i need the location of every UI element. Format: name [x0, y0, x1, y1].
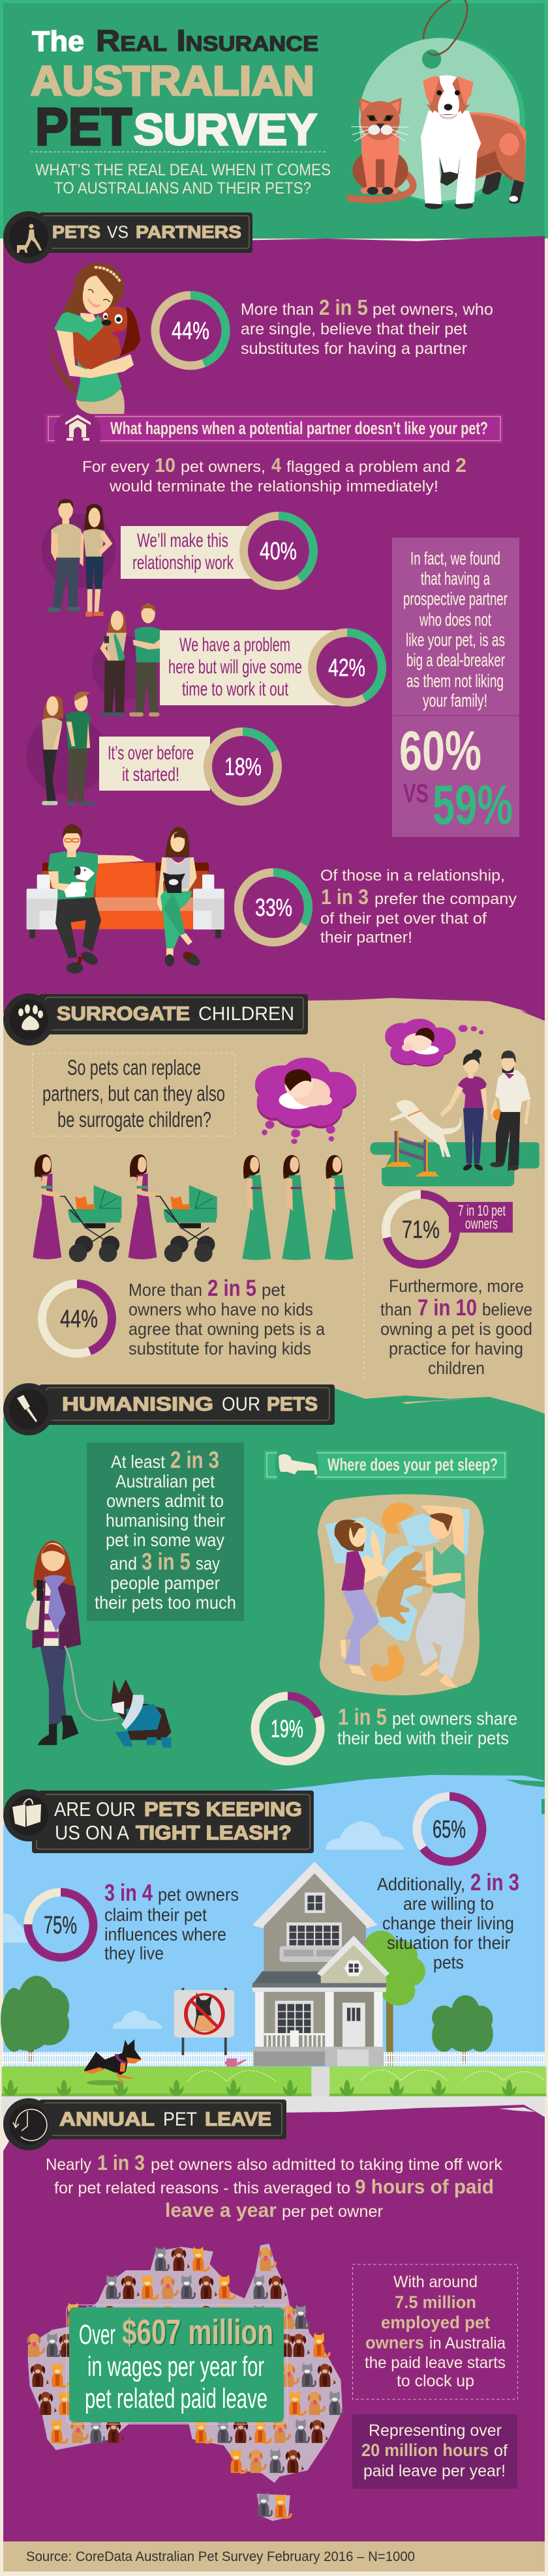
title: Real Insurance	[96, 23, 318, 57]
panel: surrogate children	[3, 993, 545, 1421]
heading: surrogate children	[3, 993, 308, 1046]
text: single owners stat: More than	[241, 300, 314, 319]
text: no kids stat: pet	[262, 1280, 285, 1300]
subtitle: TO AUSTRALIANS AND THEIR PETS?	[54, 179, 311, 198]
label: we have a problem: We have a problem	[179, 634, 290, 656]
text: company of pet stat	[320, 867, 517, 946]
text block: humanising stat: their pets too much	[95, 1592, 236, 1613]
map: Australia filled with cats and dogs	[27, 2244, 343, 2521]
icon: clock	[13, 2109, 47, 2141]
title: AUSTRALIAN	[31, 57, 314, 104]
text: no kids stat: owners who have no kids	[129, 1300, 313, 1319]
text block: humanising stat: At least	[111, 1452, 165, 1472]
icon: clouds	[3, 1821, 404, 2028]
label: we have a problem: here but will give some	[168, 656, 302, 678]
text: time off work stat: for pet related reasons - this averaged to	[54, 2179, 350, 2197]
text block: humanising stat: say	[196, 1553, 220, 1573]
illustration: running dog	[84, 2040, 142, 2085]
panel: deal-breaker comparison: that having a	[421, 568, 490, 589]
text: no kids stat	[129, 1276, 326, 1358]
illustration: thought cloud with baby	[255, 1058, 356, 1144]
text: single owners stat: 2 in 5	[319, 295, 368, 319]
panel: deal-breaker comparison: as them not liking	[406, 671, 504, 691]
callout: $607 million	[67, 2305, 287, 2424]
text: company of pet stat: of their pet over that of	[320, 910, 487, 928]
title	[31, 23, 318, 156]
text block: humanising stat: humanising their	[106, 1510, 225, 1530]
subtitle: WHAT’S THE REAL DEAL WHEN IT COMES	[35, 161, 331, 179]
donut: 18%: 18%	[224, 754, 262, 781]
donut: 42%: 42%	[328, 654, 365, 682]
donut: 18%	[207, 731, 278, 802]
text: change living situation: pets	[433, 1952, 464, 1972]
callout: 20 million hours	[352, 2414, 517, 2489]
heading: annual pet leave: PET	[163, 2109, 197, 2130]
text: no kids stat: 2 in 5	[207, 1276, 256, 1301]
heading: surrogate children: CHILDREN	[198, 1003, 294, 1025]
text: change living situation: situation for their	[387, 1933, 510, 1953]
text: change living situation: change their living	[382, 1913, 514, 1933]
illustration: small thought cloud with baby	[385, 1019, 483, 1066]
text: no kids stat: More than	[129, 1280, 202, 1300]
text: influence where they live: 3 in 4	[104, 1879, 153, 1906]
text: time off work stat: 1 in 3	[97, 2151, 145, 2174]
callout: 7.5 million employed pet owners: With around	[393, 2273, 478, 2291]
heading: annual pet leave: ANNUAL	[59, 2109, 155, 2130]
heading: surrogate children: SURROGATE	[57, 1003, 190, 1025]
text: for every 10 pet owners: pet owners,	[181, 458, 266, 476]
heading: are our pets keeping us on a tight leash: PETS KEEPING	[144, 1798, 302, 1821]
panel: pets vs partners	[3, 211, 545, 1023]
heading: annual pet leave: LEAVE	[205, 2109, 271, 2130]
panel: annual pet leave	[3, 2098, 545, 2541]
text: share bed stat: 1 in 5	[338, 1705, 387, 1730]
text: no kids stat: agree that owning pets is a	[129, 1319, 326, 1339]
title: The	[32, 25, 84, 57]
title: SURVEY	[134, 105, 317, 154]
panel: deal-breaker comparison: 60%	[399, 720, 481, 782]
text: share bed stat	[337, 1705, 517, 1748]
text: change living situation: are willing to	[403, 1894, 494, 1914]
text: for every 10 pet owners: For every	[82, 458, 149, 476]
callout: $607 million: in wages per year for	[87, 2351, 264, 2382]
callout: 20 million hours: paid leave per year!	[363, 2462, 506, 2480]
text: influence where they live	[104, 1879, 239, 1963]
callout: $607 million: $607 million	[122, 2313, 273, 2352]
text block: humanising stat	[87, 1442, 244, 1621]
text: for every 10 pet owners: 4	[271, 454, 282, 476]
donut: 65%: 65%	[433, 1816, 466, 1843]
donut: 40%	[244, 516, 313, 585]
text: company of pet stat: prefer the company	[374, 890, 517, 908]
text: practice for children stat: owning a pet is good	[380, 1319, 532, 1339]
heading: humanising our pets	[3, 1383, 335, 1435]
callout: $607 million: pet related paid leave	[85, 2383, 267, 2414]
text block: humanising stat: owners admit to	[106, 1491, 224, 1511]
text block: humanising stat: people pamper	[110, 1573, 220, 1593]
panel: deal-breaker comparison: who does not	[419, 609, 491, 630]
text: share bed stat: their bed with their pets	[337, 1728, 509, 1748]
illustration: couple three	[26, 692, 106, 805]
label: we'll make this work: We’ll make this	[137, 530, 228, 551]
panel: are our pets keeping us on a tight leash	[1, 1775, 546, 2125]
text: practice for children stat: Furthermore, more	[389, 1276, 524, 1296]
callout: 7.5 million employed pet owners: in Australia	[429, 2334, 506, 2352]
callout: 7.5 million employed pet owners: employed pet	[381, 2313, 490, 2332]
illustration: couple one	[42, 499, 115, 617]
heading: are our pets keeping us on a tight leash: US ON A	[55, 1821, 129, 1844]
callout: 7.5 million employed pet owners: to clock up	[397, 2372, 474, 2390]
text: single owners stat: substitutes for having a partner	[241, 340, 467, 358]
donut: 75%: 75%	[44, 1912, 77, 1939]
callout: 7.5 million employed pet owners: 7.5 million	[395, 2292, 476, 2312]
footer: source	[3, 2541, 545, 2571]
heading: pets vs partners	[3, 211, 252, 263]
label: we have a problem	[160, 630, 339, 705]
icon: pet carrier	[12, 1799, 41, 1827]
text: practice for children stat: believe	[482, 1300, 532, 1319]
text: practice for children stat: than	[380, 1300, 412, 1319]
heading: are our pets keeping us on a tight leash: TIGHT LEASH?	[136, 1821, 292, 1844]
text: practice for children stat: 7 in 10	[418, 1295, 477, 1321]
callout: surrogate question: be surrogate children?	[57, 1107, 211, 1132]
text: share bed stat: pet owners share	[392, 1708, 517, 1729]
text: time off work stat: 9 hours of paid	[355, 2175, 494, 2198]
label: it's over before it started: it started!	[122, 764, 179, 785]
icon: pet tag with cat and dog	[350, 0, 526, 209]
text: time off work stat: per pet owner	[282, 2203, 383, 2221]
text: practice for children stat: practice for having	[389, 1339, 523, 1358]
text block: humanising stat: and	[110, 1553, 137, 1573]
donut: 44% kids: 44%	[60, 1306, 98, 1333]
text: time off work stat: leave a year	[165, 2199, 277, 2221]
callout: 7.5 million employed pet owners: the paid leave starts	[365, 2354, 506, 2372]
label: we have a problem: time to work it out	[182, 679, 288, 700]
icon: watering can	[224, 2058, 247, 2066]
label: we'll make this work	[121, 526, 254, 579]
heading: are our pets keeping us on a tight leash	[3, 1789, 314, 1853]
heading: annual pet leave	[3, 2098, 286, 2150]
pictogram: women with prams and without	[33, 1154, 354, 1262]
text: change living situation	[377, 1869, 519, 1972]
illustration: couple training dog over hurdle	[370, 1049, 540, 1186]
panel: deal-breaker comparison: In fact, we found	[410, 548, 500, 568]
icon: runner with dog	[17, 224, 42, 253]
illustration: couple on sofa with pets	[27, 824, 224, 974]
sign: no dogs	[174, 1988, 234, 2055]
donut: 44%	[155, 295, 226, 366]
banner: where does your pet sleep	[264, 1450, 508, 1480]
donut: 40%: 40%	[260, 538, 297, 565]
callout: $607 million: Over	[79, 2319, 115, 2350]
text: single owners stat	[241, 295, 493, 358]
panel: humanising our pets	[3, 1383, 545, 1812]
donut: 71%: 71%	[402, 1216, 440, 1244]
heading: pets vs partners: VS	[107, 222, 129, 242]
text: influence where they live: pet owners	[158, 1884, 239, 1905]
panel: hero header	[0, 0, 548, 239]
text: for every 10 pet owners: would terminate the relationship immediately!	[109, 478, 438, 495]
title: PET	[35, 98, 132, 156]
callout: surrogate question: So pets can replace	[67, 1055, 201, 1079]
panel: deal-breaker comparison: VS	[403, 778, 429, 808]
callout: surrogate question: partners, but can they also	[42, 1081, 225, 1105]
text: time off work stat: Nearly	[46, 2156, 91, 2174]
callout: $607 million: $607 million	[123, 2314, 275, 2353]
footer: source: Source: CoreData Australian Pet Survey February 2016 – N=1000	[26, 2549, 415, 2564]
panel: deal-breaker comparison: 59%	[433, 774, 513, 836]
text: time off work stat	[46, 2151, 503, 2221]
panel: deal-breaker comparison: like your pet, is as	[406, 630, 505, 650]
label: we'll make this work: relationship work	[132, 552, 234, 574]
callout: 20 million hours: of	[494, 2442, 508, 2460]
heading: are our pets keeping us on a tight leash: ARE OUR	[54, 1798, 136, 1821]
label: it's over before it started: It’s over before	[108, 742, 194, 764]
text: change living situation: 2 in 3	[470, 1869, 519, 1895]
panel: deal-breaker comparison: your family!	[423, 690, 487, 710]
text: change living situation: Additionally,	[377, 1874, 465, 1894]
illustration: woman hugging dog	[50, 263, 140, 414]
callout: 20 million hours: 20 million hours	[361, 2440, 489, 2460]
text: single owners stat: pet owners, who	[373, 300, 493, 319]
text block: humanising stat: Australian pet	[115, 1471, 215, 1491]
heading: humanising our pets: PETS	[267, 1394, 318, 1415]
text: for every 10 pet owners: flagged a problem and	[286, 458, 450, 476]
callout: surrogate question	[33, 1053, 235, 1136]
donut: 33%: 33%	[255, 894, 292, 922]
illustration: woman walking dog in coat	[26, 1540, 171, 1748]
heading: pets vs partners: PARTNERS	[136, 222, 241, 242]
text: for every 10 pet owners: 2	[455, 454, 466, 476]
heading: pets vs partners: PETS	[52, 222, 100, 242]
donut: 42%	[312, 632, 382, 703]
text: time off work stat: pet owners also admitted to taking time off work	[151, 2156, 503, 2174]
text block: humanising stat: 2 in 3	[170, 1446, 219, 1473]
callout: 7.5 million employed pet owners: owners	[365, 2333, 424, 2352]
text: practice for children stat: children	[428, 1358, 485, 1378]
icon: paw print	[18, 1004, 43, 1030]
donut: 71%	[386, 1194, 513, 1265]
text: single owners stat: are single, believe that their pet	[241, 320, 467, 338]
donut: 19%	[255, 1696, 320, 1761]
text: influence where they live: claim their pet	[104, 1905, 207, 1925]
text block: humanising stat: pet in some way	[106, 1530, 224, 1550]
illustration: house garden and dog	[1, 1862, 546, 2116]
donut: 19%: 19%	[271, 1716, 303, 1743]
donut: 65%	[417, 1796, 482, 1862]
text: company of pet stat: their partner!	[320, 929, 412, 946]
subtitle	[35, 161, 331, 198]
icon: dog house	[65, 415, 91, 441]
icon: bed	[279, 1454, 317, 1474]
label: it's over before it started	[99, 737, 210, 791]
donut: 75%	[28, 1892, 93, 1957]
donut: 33%	[239, 872, 308, 943]
icon: pet brush	[17, 1395, 37, 1422]
donut: 44% kids	[42, 1284, 112, 1353]
callout: 7.5 million employed pet owners	[352, 2264, 518, 2399]
heading: humanising our pets: HUMANISING	[62, 1394, 213, 1415]
text: for every 10 pet owners	[82, 454, 466, 495]
text block: humanising stat: 3 in 5	[142, 1548, 190, 1575]
donut: 71%: owners	[465, 1215, 498, 1232]
text: for every 10 pet owners: 10	[155, 454, 175, 476]
illustration: couple two	[92, 604, 161, 716]
text: company of pet stat: Of those in a relationship,	[320, 867, 505, 885]
text: company of pet stat: 1 in 3	[321, 885, 369, 909]
donut: 44%: 44%	[172, 317, 209, 345]
banner: potential partner question	[45, 412, 503, 443]
text: practice for children stat	[380, 1276, 532, 1378]
donut: 71%: 7 in 10 pet	[458, 1202, 506, 1219]
text: influence where they live: they live	[104, 1943, 164, 1963]
text: no kids stat: substitute for having kids	[129, 1339, 311, 1358]
panel: deal-breaker comparison	[392, 538, 519, 837]
heading: humanising our pets: OUR	[222, 1394, 260, 1415]
callout: 20 million hours: Representing over	[369, 2422, 502, 2440]
text: influence where they live: influences where	[104, 1924, 226, 1944]
illustration: couple sleeping with pets	[318, 1494, 484, 1695]
